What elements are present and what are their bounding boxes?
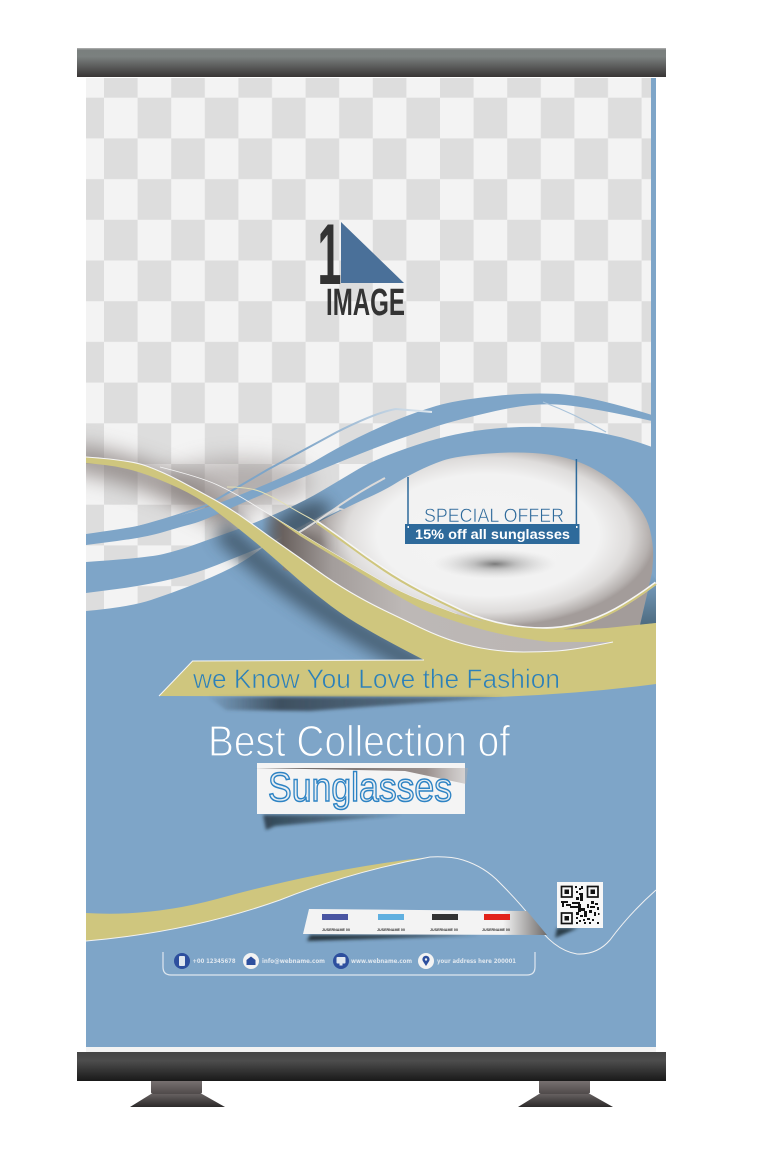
contact bar [163,952,535,975]
blue wide wave band [86,427,656,600]
swatch labels: JUSERNAME 00 [322,927,351,932]
swatch 3 [432,914,458,920]
gold main wave and ribbon [86,457,656,697]
label top shadow [253,768,468,784]
QR finder squares [562,886,598,924]
footer white curve [86,857,656,954]
offer box [405,524,580,544]
egg centre shadow [433,549,557,579]
footer gold swoosh [86,857,430,941]
thin light highlight stripe [283,478,385,542]
special offer sign [405,459,580,544]
strip shadow [307,935,480,941]
box dots [408,526,578,528]
swatch labels: JUSERNAME 00 [430,927,459,932]
swatch 4 [484,914,510,920]
swatch 1 [322,914,348,920]
dark blue corner shading [640,573,656,625]
label text: Sunglasses [268,764,452,810]
gold wave white outlines [86,457,613,696]
logo digit: 1 [318,207,341,303]
grey band between gold waves [146,466,613,652]
smoke shading behind waves [70,458,312,522]
headline: Best Collection of [208,717,511,766]
ribbon tagline: we Know You Love the Fashion [192,664,560,694]
icon: envelope [243,953,259,969]
swatch labels: JUSERNAME 00 [482,927,511,932]
QR code [555,882,603,938]
white line above grey band [160,467,456,614]
blue band dark shading [262,491,341,542]
QR modules [561,886,600,924]
left foot [130,1081,225,1107]
swatch 2 [378,914,404,920]
thin pale wave start [227,487,325,528]
colour names strip [303,909,547,941]
blue lower field [86,500,656,1047]
swatch labels [322,927,511,932]
email: info@webname.com [262,957,325,965]
egg left tip shading [300,526,332,550]
sunglasses label [253,763,468,830]
contact bar border [163,952,535,975]
QR background [557,882,603,928]
grey egg shape [283,452,653,645]
gold wave shadow [222,530,425,668]
bottom lip [86,1047,656,1052]
logo triangle [341,222,404,283]
logo [318,207,405,324]
roll-up banner infographic [77,48,666,1107]
icon: phone [174,953,190,969]
phone number: +00 12345678 [192,957,236,965]
bottom bar [77,1052,666,1081]
ribbon shadow [208,697,503,711]
offer text: 15% off all sunglasses [415,526,570,542]
thin light wave right [543,402,606,432]
top bar [77,48,666,77]
thin blue wave [130,409,432,529]
hanging lines [408,459,576,524]
label box [257,763,465,814]
right foot [518,1081,613,1107]
thin gold wave [317,522,656,630]
blue upper wave band [86,394,652,545]
gold middle wave [270,515,656,645]
label bottom shadow [263,815,403,830]
special offer heading: SPECIAL OFFER [424,505,564,527]
address: your address here 200001 [437,957,516,965]
panel: banner artwork [70,78,656,1047]
swatch labels: JUSERNAME 00 [377,927,406,932]
checkerboard placeholder background [86,78,652,618]
QR shadow [555,928,578,938]
strip background [303,909,547,935]
logo word: IMAGE [326,282,405,324]
icon: monitor [333,953,349,969]
website: www.webname.com [351,957,412,965]
right blue edge strip [651,78,656,453]
icon: location pin [418,953,434,969]
